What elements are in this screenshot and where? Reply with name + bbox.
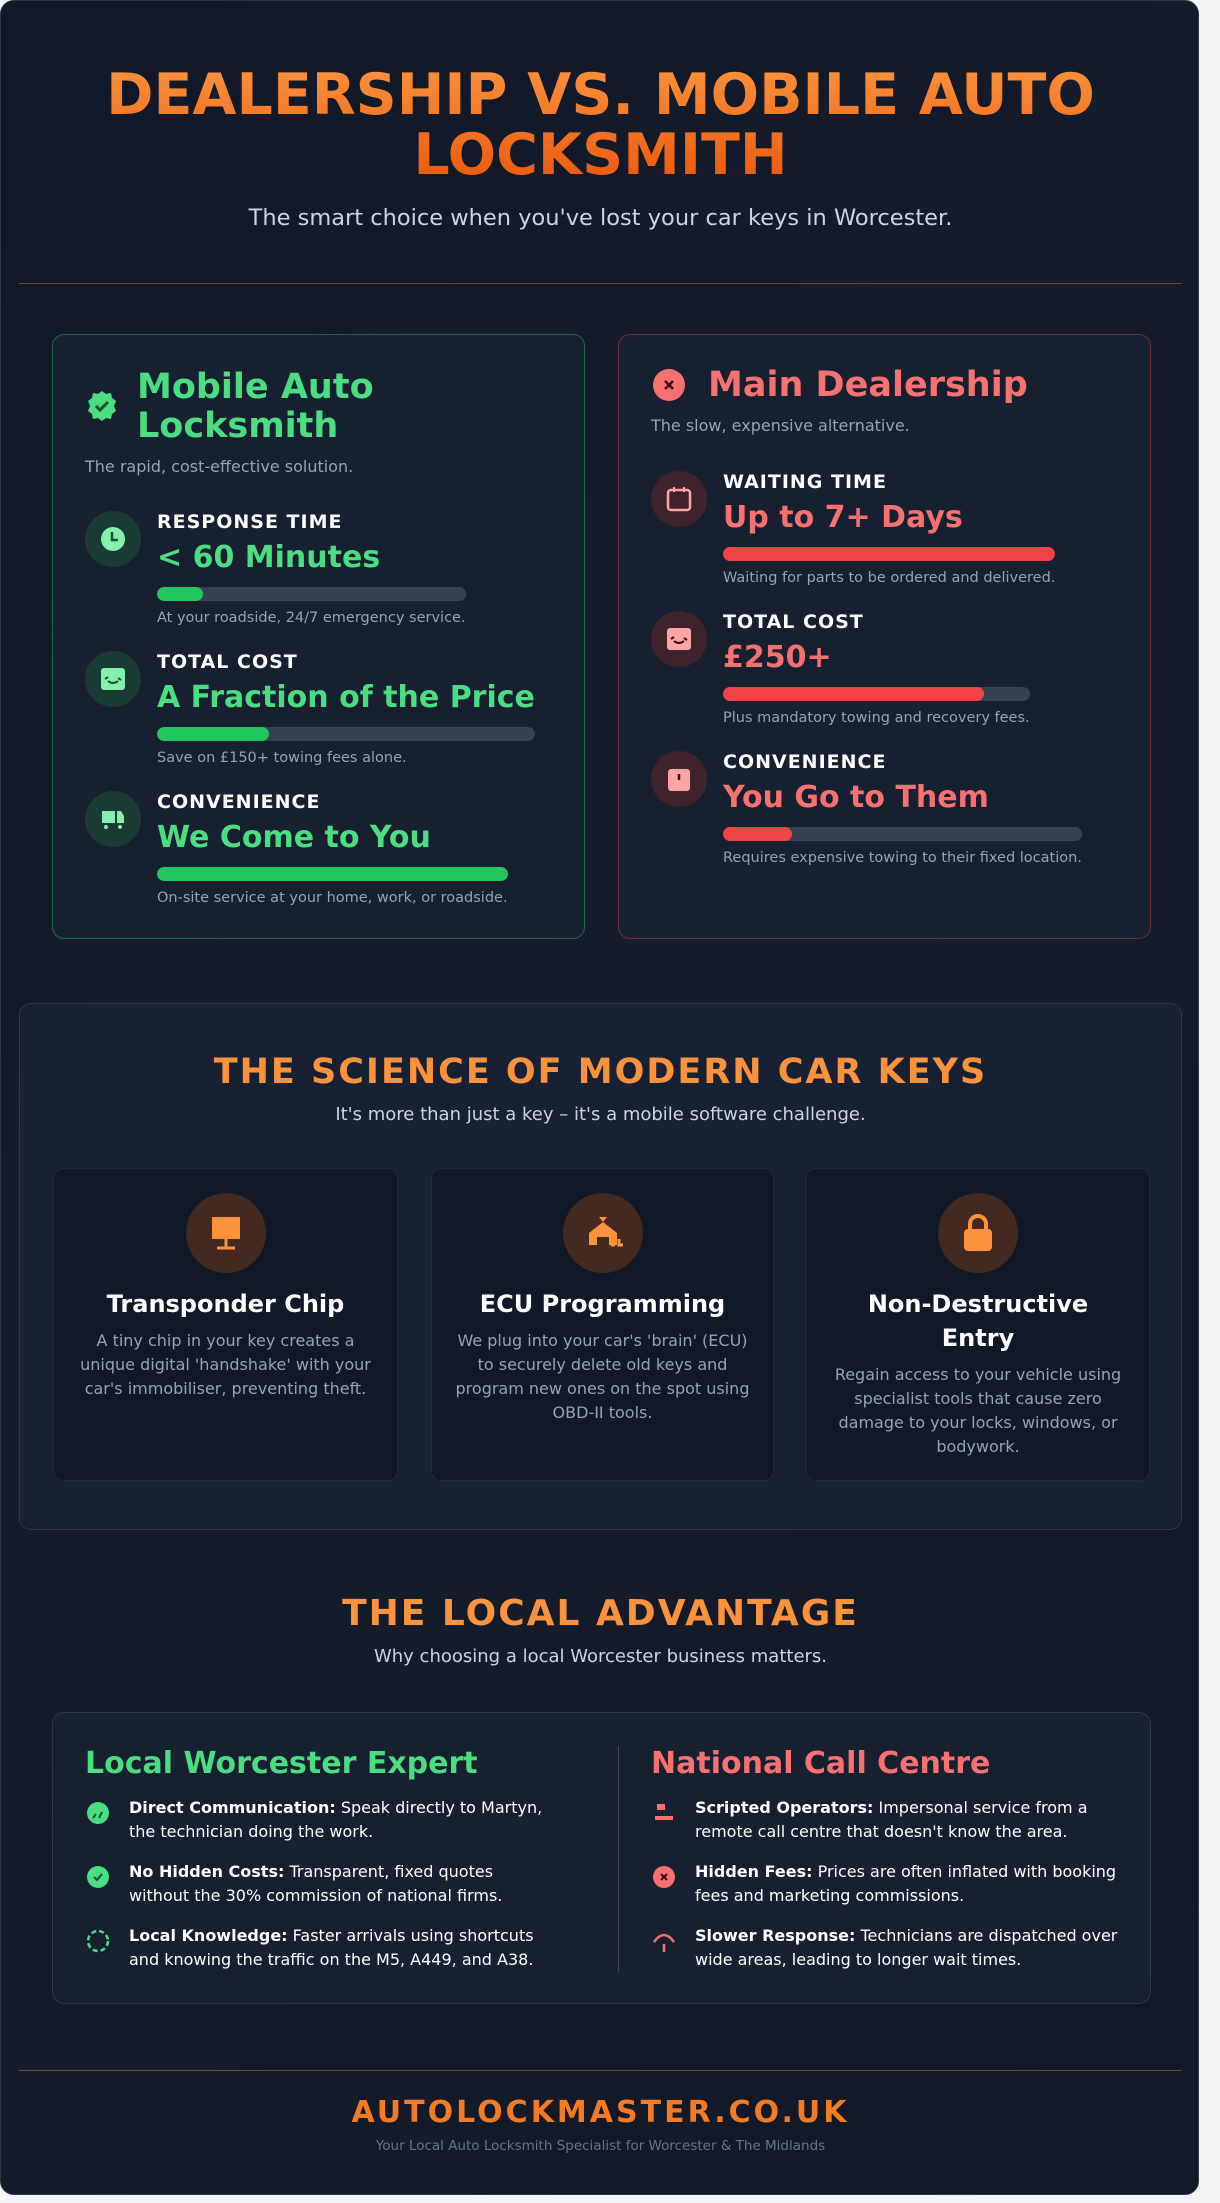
- metric: total cost: Plus mandatory towing and recovery fees.: [723, 710, 1030, 726]
- metric: waiting time: Waiting for parts to be ordered and delivered.: [723, 570, 1055, 586]
- title: DEALERSHIP VS. MOBILE AUTO: [106, 62, 1095, 128]
- heading: Mobile Auto: [137, 367, 374, 407]
- subtitle: The smart choice when you've lost your car keys in Worcester.: [249, 205, 952, 231]
- metric: convenience: [85, 791, 508, 906]
- metric: convenience: We Come to You: [157, 820, 431, 855]
- metric: waiting time: [651, 471, 1055, 586]
- icon: padlock: [938, 1193, 1018, 1273]
- heading: national call centre: National Call Centre: [651, 1746, 990, 1781]
- card: non-destructive entry: Entry: [942, 1324, 1014, 1352]
- item: no hidden costs: No Hidden Costs: Transparent, fixed quotes without the 30% commission of national firms.: [129, 1862, 502, 1905]
- card: ecu programming: We plug into your car's 'brain' (ECU) to securely delete old keys and program new ones on the spot using OBD-II tools.: [456, 1331, 749, 1422]
- metric: convenience: CONVENIENCE: [723, 751, 886, 773]
- icon: ecu: [562, 1193, 642, 1273]
- metric: waiting time: WAITING TIME: [723, 471, 887, 493]
- card: transponder chip: [53, 1168, 398, 1481]
- item: scripted operators: Scripted Operators: Impersonal service from a remote call centre that doesn't know the area.: [695, 1798, 1088, 1841]
- card: transponder chip: Transponder Chip: [107, 1290, 344, 1318]
- metric: convenience: On-site service at your home, work, or roadside.: [157, 890, 508, 906]
- metric: response time: < 60 Minutes: [157, 540, 380, 575]
- metric: convenience: [651, 751, 1082, 866]
- icon: check badge: [88, 391, 116, 421]
- card: non-destructive entry: Non-Destructive: [868, 1290, 1088, 1318]
- heading: THE SCIENCE OF MODERN CAR KEYS: [214, 1052, 987, 1092]
- heading: local advantage: THE LOCAL ADVANTAGE: [342, 1593, 859, 1634]
- metric: convenience: You Go to Them: [723, 780, 989, 815]
- footer tagline: Your Local Auto Locksmith Specialist for Worcester & The Midlands: [376, 2138, 825, 2154]
- metric: response time: At your roadside, 24/7 emergency service.: [157, 610, 466, 626]
- heading: Locksmith: [137, 406, 338, 446]
- description: The slow, expensive alternative.: [651, 416, 910, 435]
- card: transponder chip: A tiny chip in your key creates a unique digital 'handshake' with your car's immobiliser, preventing theft.: [80, 1331, 371, 1398]
- description: The rapid, cost-effective solution.: [85, 457, 353, 476]
- metric: total cost: TOTAL COST: [723, 611, 864, 633]
- card: non-destructive entry: Regain access to your vehicle using specialist tools that cause zero damage to your locks, windows, or bodywork.: [835, 1365, 1121, 1456]
- title: [1, 65, 1200, 185]
- title: LOCKSMITH: [413, 122, 788, 188]
- metric: response time: RESPONSE TIME: [157, 511, 342, 533]
- card: ecu programming: ECU Programming: [480, 1290, 725, 1318]
- metric: total cost: [651, 611, 1030, 726]
- footer brand: AUTOLOCKMASTER.CO.UK: [352, 2095, 850, 2130]
- metric: convenience: CONVENIENCE: [157, 791, 320, 813]
- panel: main dealership: [618, 334, 1151, 939]
- metric: total cost: A Fraction of the Price: [157, 680, 535, 715]
- metric: total cost: £250+: [723, 640, 832, 675]
- metric: total cost: [85, 651, 535, 766]
- item: hidden fees: Hidden Fees: Prices are often inflated with booking fees and marketing commissions.: [695, 1862, 1116, 1905]
- metric: waiting time: Up to 7+ Days: [723, 500, 963, 535]
- heading: [137, 367, 374, 446]
- item: direct communication: Direct Communication: Speak directly to Martyn, the technician doing the work.: [129, 1798, 542, 1841]
- heading: Main Dealership: [708, 365, 1028, 405]
- metric: total cost: TOTAL COST: [157, 651, 298, 673]
- panel: science of modern car keys: [19, 1003, 1182, 1530]
- heading: local expert: Local Worcester Expert: [85, 1746, 478, 1781]
- panel: local vs national: [52, 1712, 1151, 2004]
- subheading: Why choosing a local Worcester business matters.: [374, 1646, 827, 1667]
- icon: chip: [186, 1193, 266, 1273]
- metric: response time: [85, 511, 466, 626]
- subheading: It's more than just a key – it's a mobile software challenge.: [335, 1104, 866, 1125]
- icon: x circle: [653, 369, 685, 401]
- card: ecu programming: [431, 1168, 774, 1481]
- metric: convenience: Requires expensive towing to their fixed location.: [723, 850, 1082, 866]
- item: slower response: Slower Response: Technicians are dispatched over wide areas, leading to longer wait times.: [695, 1926, 1117, 1969]
- card: non-destructive entry: [806, 1168, 1150, 1481]
- metric: total cost: Save on £150+ towing fees alone.: [157, 750, 407, 766]
- panel: mobile auto locksmith: [52, 334, 585, 939]
- item: local knowledge: Local Knowledge: Faster arrivals using shortcuts and knowing the traffic on the M5, A449, and A38.: [129, 1926, 534, 1969]
